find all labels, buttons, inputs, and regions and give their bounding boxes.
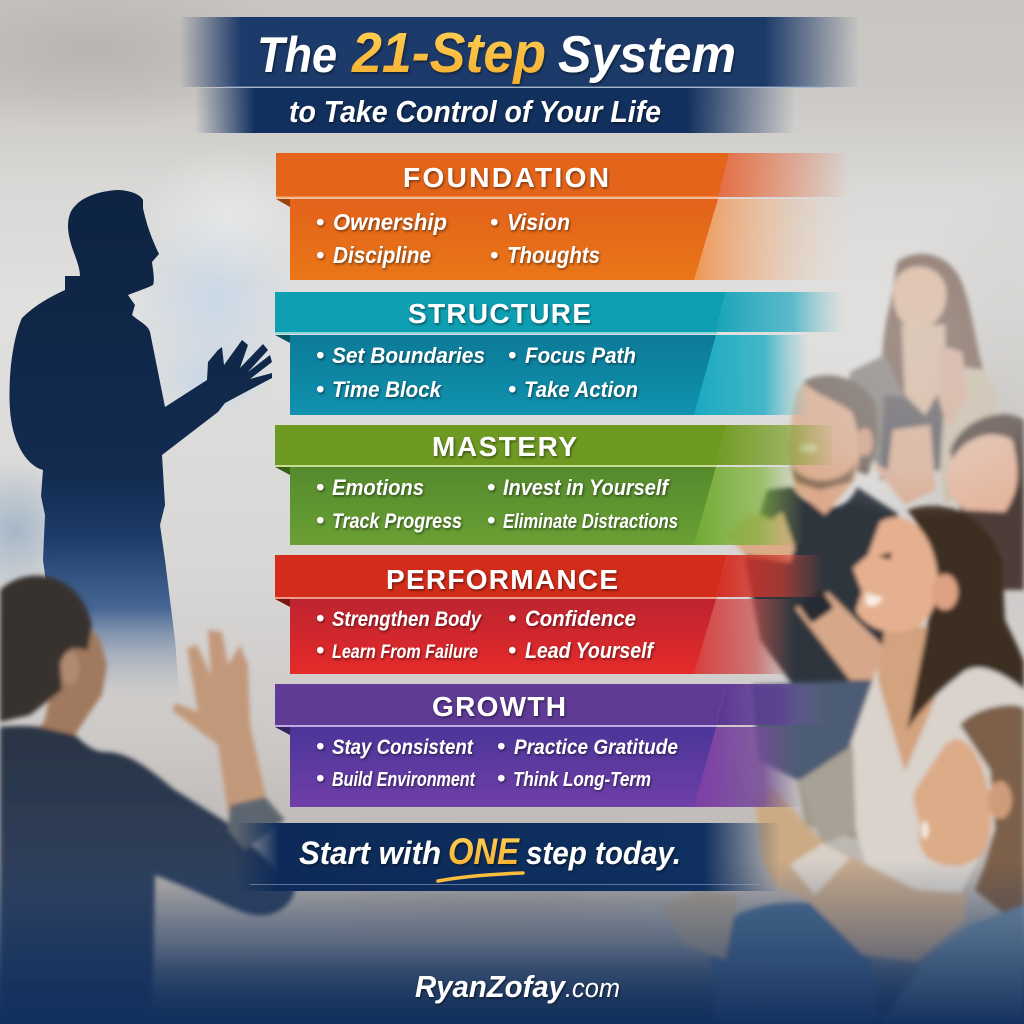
audience: seated legs and sweater — [662, 890, 880, 1024]
divider line — [225, 86, 825, 88]
growth list: • — [497, 765, 505, 791]
foundation list: • — [316, 242, 324, 268]
growth body — [290, 727, 716, 807]
foundation body — [290, 199, 718, 280]
structure faded extension — [692, 292, 845, 415]
growth faded extension — [692, 684, 825, 807]
foundation list: Thoughts — [507, 242, 600, 268]
growth list: • — [316, 733, 324, 759]
website footer: .com — [565, 973, 620, 1003]
foreground man: ear — [61, 651, 79, 685]
growth list: Build Environment — [332, 769, 476, 791]
banner text — [299, 831, 681, 872]
foundation list: Ownership — [333, 209, 447, 235]
structure list: • — [508, 342, 516, 368]
panel: growth — [275, 684, 825, 807]
title text — [257, 21, 736, 85]
performance list: Confidence — [525, 606, 636, 631]
foreground man: hair — [0, 576, 92, 722]
performance list: • — [316, 605, 324, 631]
structure body — [290, 335, 716, 415]
foundation list — [316, 209, 600, 268]
photo: seated audience on the right — [662, 254, 1024, 1024]
audience: man in dark shirt clapping — [726, 375, 915, 840]
title band — [180, 17, 860, 87]
panel: mastery — [275, 425, 832, 545]
mastery list: Eliminate Distractions — [503, 511, 678, 533]
bottom navy fade — [0, 860, 1024, 1024]
mastery list: • — [316, 474, 324, 500]
performance heading: PERFORMANCE — [386, 564, 618, 595]
performance list: Learn From Failure — [332, 642, 478, 663]
performance fold — [275, 599, 290, 607]
mastery body — [290, 467, 716, 545]
performance header — [275, 555, 727, 597]
growth list: • — [316, 765, 324, 791]
foundation fold — [276, 199, 290, 207]
title text: System — [558, 26, 736, 84]
mastery heading: MASTERY — [432, 431, 577, 462]
foundation list: • — [490, 209, 498, 235]
growth header — [275, 684, 726, 725]
yellow underline — [438, 873, 523, 881]
banner band — [235, 823, 780, 891]
performance faded extension — [692, 555, 825, 674]
mastery list — [316, 474, 678, 533]
mastery list: Track Progress — [332, 510, 462, 533]
foundation list: • — [490, 242, 498, 268]
growth list: Practice Gratitude — [514, 736, 678, 759]
foundation faded extension — [692, 153, 850, 280]
foreground man: raised arm and hand — [172, 630, 268, 812]
mastery list: Invest in Yourself — [503, 475, 670, 500]
structure list: Focus Path — [525, 343, 636, 368]
structure list — [316, 342, 638, 402]
audience: woman in front — [755, 705, 1024, 1024]
mastery list: • — [487, 507, 495, 533]
performance list: Lead Yourself — [525, 638, 655, 663]
subtitle text: to Take Control of Your Life — [289, 94, 661, 129]
performance list: • — [508, 605, 516, 631]
foundation list: Discipline — [333, 242, 431, 268]
structure list: • — [316, 376, 324, 402]
panel: structure — [275, 292, 845, 415]
structure list: • — [508, 376, 516, 402]
fog over audience — [730, 160, 1024, 520]
mastery list: • — [487, 474, 495, 500]
foundation list: • — [316, 209, 324, 235]
foreground man: neck and face — [40, 615, 107, 735]
banner text: Start with — [299, 835, 441, 871]
mastery list: • — [316, 507, 324, 533]
photo: man in foreground with raised hand — [0, 576, 295, 1024]
growth list: • — [497, 733, 505, 759]
banner text: step today. — [526, 835, 681, 871]
performance list — [316, 605, 655, 663]
performance list: Strengthen Body — [332, 608, 482, 631]
foundation heading: FOUNDATION — [403, 162, 609, 193]
structure list: Set Boundaries — [332, 343, 485, 368]
structure list: • — [316, 342, 324, 368]
growth heading: GROWTH — [432, 691, 566, 722]
panel: performance — [275, 555, 825, 674]
performance list: • — [316, 637, 324, 663]
speaker silhouette — [10, 190, 272, 700]
mastery list: Emotions — [332, 475, 424, 500]
structure fold — [275, 335, 290, 343]
growth list: Think Long-Term — [513, 769, 651, 791]
mastery header — [275, 425, 727, 465]
subtitle band — [195, 88, 795, 133]
structure header — [275, 292, 726, 332]
call to action banner — [235, 823, 780, 891]
title banner — [180, 17, 860, 133]
mastery fold — [275, 467, 290, 475]
structure heading: STRUCTURE — [408, 298, 591, 329]
foundation list: Vision — [507, 209, 570, 235]
banner text: ONE — [448, 831, 520, 872]
mastery faded extension — [692, 425, 832, 545]
title text: The — [257, 27, 337, 83]
growth list — [316, 733, 678, 791]
audience: woman at the back — [848, 254, 998, 505]
audience: woman smiling in white blouse — [800, 506, 1024, 895]
panel: foundation — [276, 153, 850, 280]
growth fold — [275, 727, 290, 735]
foreground man: sleeve cuff — [228, 797, 285, 850]
structure list: Time Block — [332, 377, 443, 402]
foundation header — [276, 153, 729, 197]
performance body — [290, 599, 716, 674]
performance list: • — [508, 637, 516, 663]
growth list: Stay Consistent — [332, 736, 474, 759]
title text: 21-Step — [351, 21, 546, 85]
foreground man: shirt — [0, 726, 295, 1024]
structure list: Take Action — [524, 377, 638, 402]
audience: woman with dark hair — [947, 414, 1024, 590]
website footer: RyanZofay — [415, 969, 567, 1004]
